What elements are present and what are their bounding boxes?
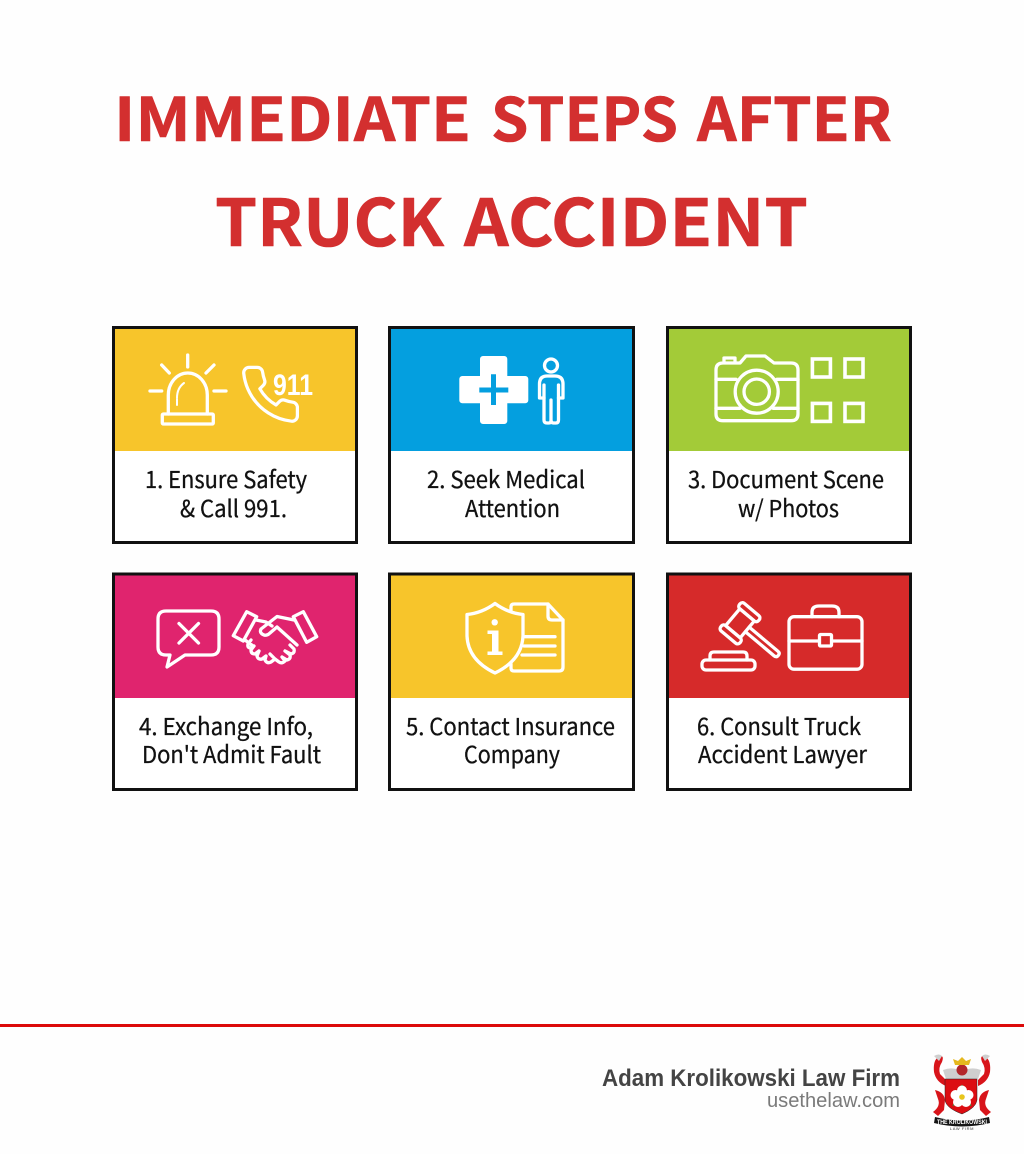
label: step 1: & Call 991. (180, 490, 287, 524)
icon: phone 911: 911 (273, 369, 313, 402)
label: step 5 (406, 708, 615, 770)
panel: step 4 exchange info (114, 574, 356, 790)
icon: shield with info (467, 604, 523, 673)
logo: family crest (933, 1054, 991, 1131)
panel: step 3 document scene (668, 328, 910, 542)
footer: firm name and website: Adam Krolikowski Law Firm (602, 1065, 900, 1092)
title: AFTER (696, 72, 892, 159)
panel: step 6 consult lawyer (668, 574, 910, 790)
label: step 1 (145, 461, 307, 524)
label: step 1: 1. Ensure Safety (145, 461, 307, 495)
panel: step 1 ensure safety (114, 328, 356, 542)
label: step 5: Company (464, 736, 560, 770)
title: IMMEDIATE (114, 72, 471, 159)
icon: document (511, 604, 563, 671)
panel: step 2 seek medical attention (390, 328, 634, 542)
icon: briefcase (789, 606, 862, 669)
icon: medical cross (459, 356, 528, 424)
label: step 3 (688, 461, 884, 524)
title: ACCIDENT (463, 171, 808, 265)
icon: person (540, 359, 563, 423)
label: step 6: 6. Consult Truck (697, 708, 861, 742)
panel: step 5 contact insurance (390, 574, 634, 790)
icon: camera (716, 356, 798, 421)
label: step 4 (139, 708, 321, 770)
icon: gavel (702, 601, 790, 670)
label: step 5: 5. Contact Insurance (406, 708, 615, 742)
logo: family crest: THE KROLIKOWSKI (937, 1120, 987, 1126)
title (114, 72, 892, 265)
label: step 2: Attention (465, 490, 560, 524)
footer: firm name and website: usethelaw.com (767, 1090, 900, 1112)
label: step 3: w/ Photos (738, 490, 839, 524)
title: STEPS (491, 72, 678, 159)
label: step 3: 3. Document Scene (688, 461, 884, 495)
footer: firm name and website (602, 1065, 900, 1112)
label: step 6 (697, 708, 868, 770)
icon: speech bubble with X (158, 611, 219, 667)
label: step 4: Don't Admit Fault (142, 736, 321, 770)
footer rule (0, 1024, 1024, 1027)
logo: family crest: LAW FIRM (950, 1126, 974, 1131)
icon: photo squares (812, 359, 863, 421)
label: step 4: 4. Exchange Info, (139, 708, 313, 742)
icon: handshake (233, 612, 317, 663)
icon: phone 911 (244, 367, 313, 421)
icon: siren (150, 355, 226, 424)
label: step 2 (427, 461, 585, 524)
title: TRUCK (215, 171, 444, 265)
label: step 2: 2. Seek Medical (427, 461, 585, 495)
label: step 6: Accident Lawyer (698, 736, 868, 770)
